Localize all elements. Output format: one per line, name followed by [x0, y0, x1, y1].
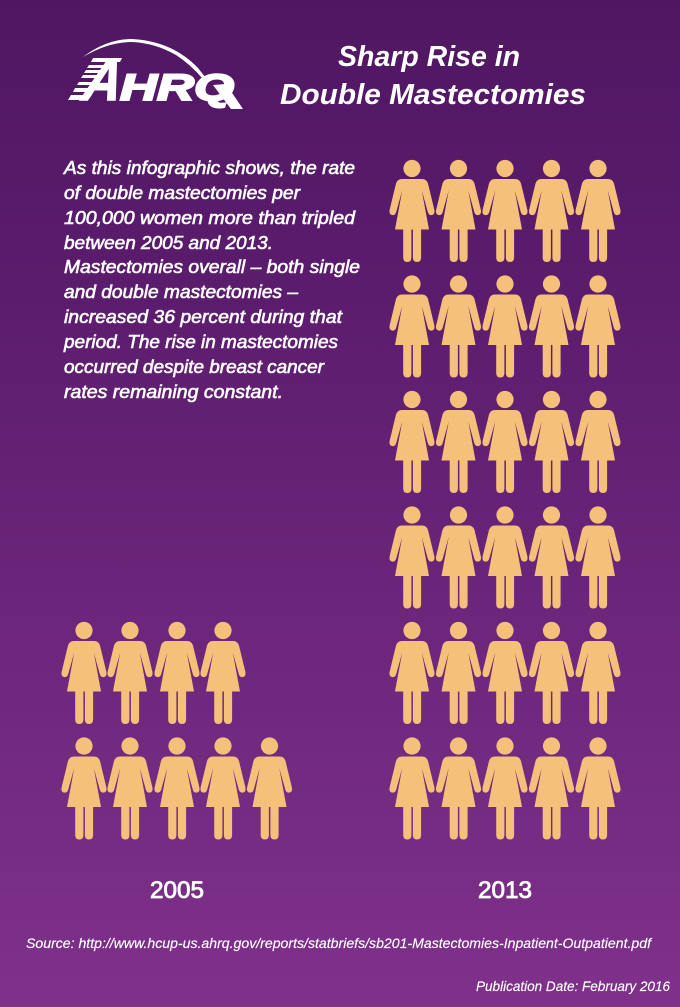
intro text block: and double mastectomies –	[64, 282, 299, 302]
publication date: Publication Date: February 2016	[476, 978, 670, 994]
intro text block: As this infographic shows, the rate	[63, 158, 355, 178]
intro text block: occurred despite breast cancer	[64, 357, 325, 377]
intro text block: between 2005 and 2013.	[64, 233, 273, 253]
logo Q tail	[213, 84, 243, 109]
intro text block: increased 36 percent during that	[64, 307, 343, 327]
intro text block: of double mastectomies per	[64, 183, 301, 203]
logo letter A: A	[74, 48, 135, 113]
logo arc	[83, 39, 209, 82]
intro text block: 100,000 women more than tripled	[64, 208, 356, 228]
title: Double Mastectomies	[280, 79, 586, 111]
pictogram: 2005 women	[61, 622, 292, 840]
title	[280, 41, 586, 111]
source: Source: http://www.hcup-us.ahrq.gov/reports/statbriefs/sb201-Mastectomies-Inpatient-Outpatient.pdf	[26, 935, 653, 951]
intro text block	[63, 158, 360, 402]
label: 2013: 2013	[478, 877, 532, 904]
logo speed stripes	[68, 58, 122, 100]
AHRQ logo	[68, 39, 243, 113]
logo letters HRQ: HRQ	[120, 67, 234, 108]
intro text block: Mastectomies overall – both single	[64, 257, 360, 277]
label: 2005: 2005	[150, 877, 204, 904]
pictogram: 2013 women	[389, 160, 621, 839]
title: Sharp Rise in	[338, 41, 520, 73]
intro text block: rates remaining constant.	[64, 382, 283, 402]
intro text block: period. The rise in mastectomies	[63, 332, 338, 352]
